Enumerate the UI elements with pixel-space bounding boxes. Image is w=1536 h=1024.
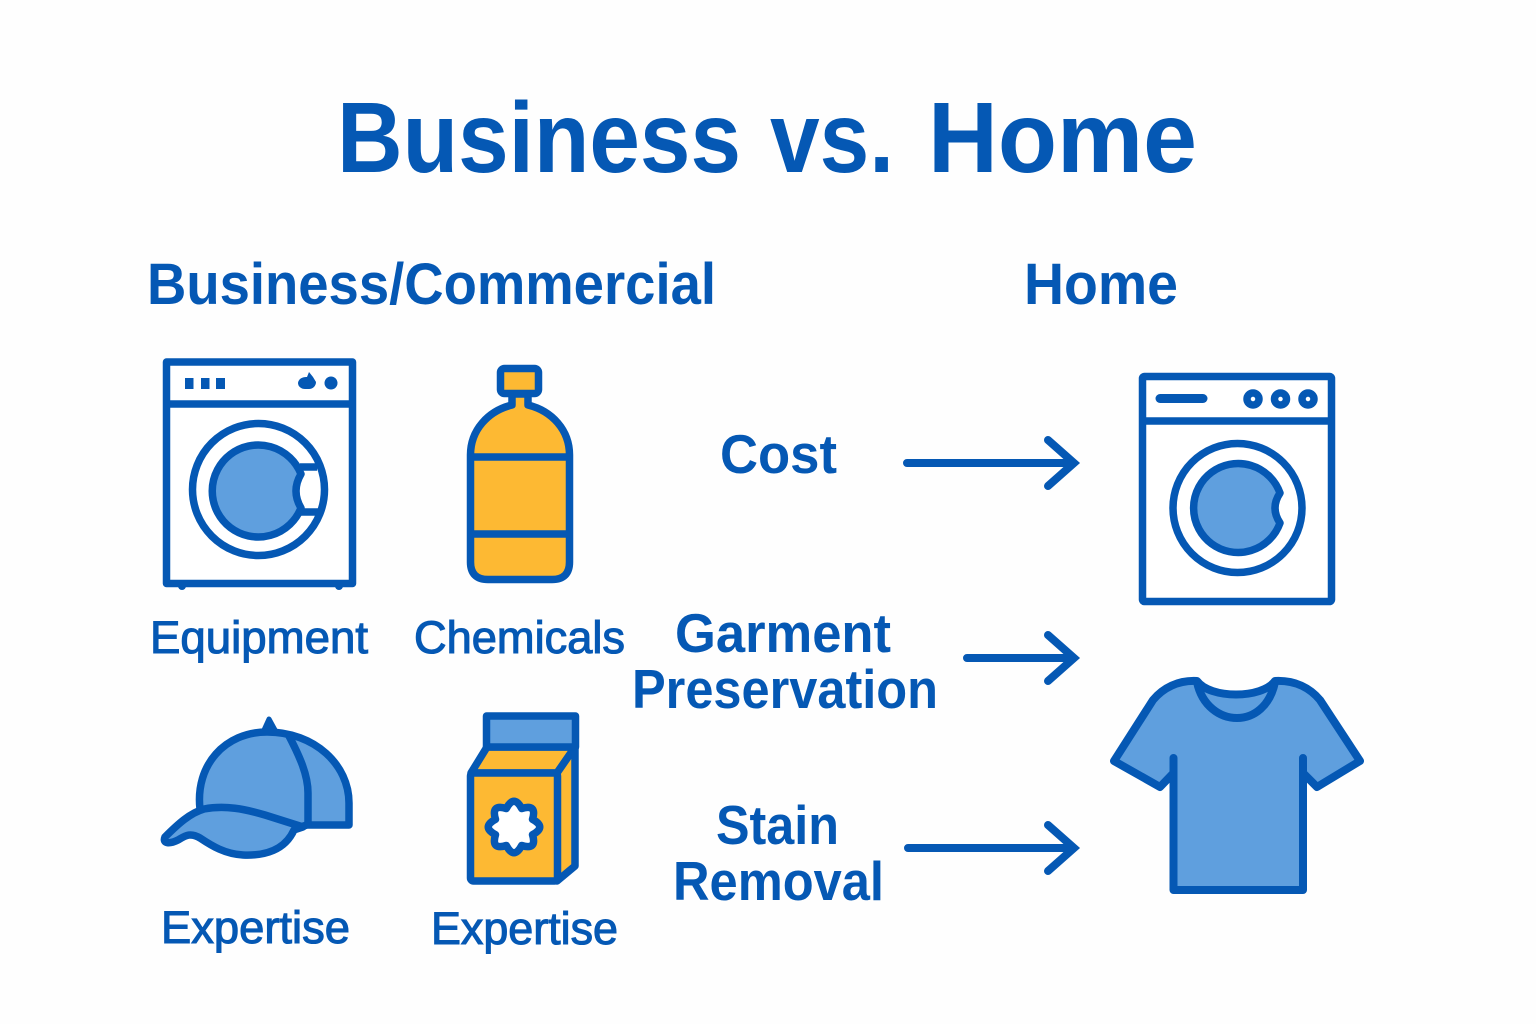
factor label: Stain Removal: Stain — [716, 794, 839, 856]
icon: commercial washing machine — [166, 362, 352, 590]
heading: Business/Commercial: Business/Commercial — [147, 252, 716, 317]
factor label: Garment Preservation: Garment — [675, 602, 891, 664]
icon: home washing machine — [1142, 376, 1332, 602]
label: Expertise (cap): Expertise — [161, 902, 350, 953]
factor label: Stain Removal: Removal — [673, 850, 884, 912]
icon: baseball cap — [164, 719, 349, 855]
label: Chemicals: Chemicals — [414, 612, 625, 663]
factor label: Stain Removal — [673, 794, 884, 912]
icon: t-shirt — [1114, 681, 1360, 890]
title: Home — [928, 82, 1197, 194]
arrow: cost — [907, 440, 1074, 486]
label: Equipment: Equipment — [150, 612, 368, 663]
title: Business — [337, 82, 741, 194]
factor label: Garment Preservation — [632, 602, 938, 720]
icon: detergent box — [470, 716, 576, 881]
factor label: Garment Preservation: Preservation — [632, 658, 938, 720]
factor label: Cost: Cost — [720, 423, 837, 485]
title: vs. — [770, 82, 894, 194]
title — [337, 82, 1197, 194]
arrow: garment preservation — [967, 635, 1074, 681]
arrow: stain removal — [908, 825, 1074, 871]
heading: Home: Home — [1024, 252, 1178, 317]
icon: chemical bottle — [470, 368, 570, 580]
label: Expertise (box): Expertise — [431, 903, 618, 954]
